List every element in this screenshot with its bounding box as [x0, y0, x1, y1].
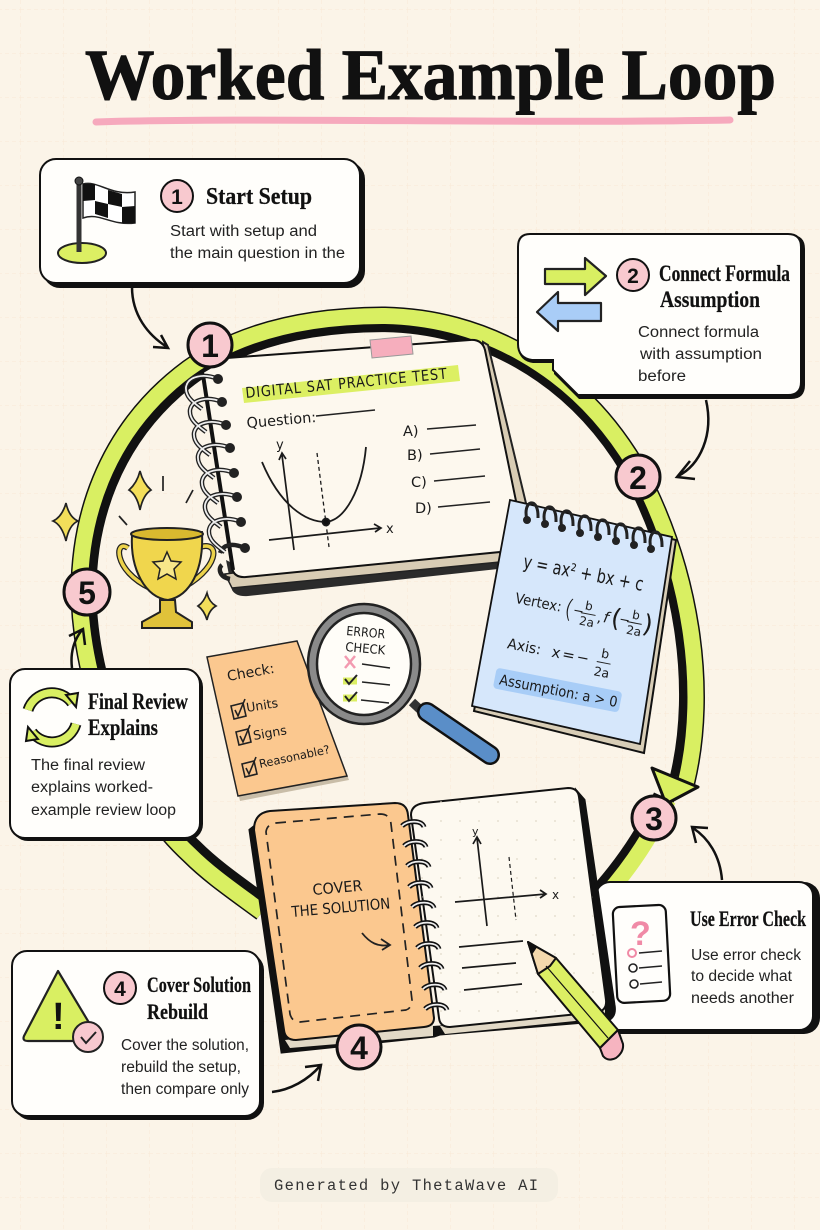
pencil: [528, 942, 623, 1060]
title underline: [96, 120, 730, 122]
card 4: cover solution rebuild: Rebuild: [147, 999, 208, 1024]
card 2: connect formula assumption: Assumption: [660, 287, 760, 312]
number badge 2: [617, 259, 649, 291]
ring badge 2: 2: [629, 460, 647, 496]
question label: Question:: [246, 410, 317, 432]
notebook: cover the solution: [250, 788, 614, 1052]
formula text: f: [602, 608, 613, 627]
arrow: card 5 to step 5: [69, 629, 85, 668]
formula text: b: [600, 645, 611, 662]
formula text: −: [572, 603, 585, 620]
number badge 2: 2: [627, 265, 639, 288]
card body: Start with setup and: [170, 223, 317, 240]
card 2: connect formula assumption: with assumption: [639, 346, 762, 363]
icon: error checklist: [613, 905, 670, 1003]
sticky note: check list: Units: [245, 695, 279, 715]
formula text: (: [609, 603, 624, 633]
arrow: card 4 to step 4: [272, 1065, 321, 1092]
magnifier: CHECK: [345, 639, 387, 658]
right page: [411, 788, 606, 1027]
number badge 1: 1: [171, 186, 183, 209]
formula text: Assumption: a > 0: [498, 672, 619, 711]
ring badge 5: 5: [78, 575, 96, 611]
formula text: [493, 550, 662, 716]
ring badge 4: 4: [350, 1030, 368, 1066]
page graph: x: [552, 888, 559, 902]
formula text: b: [584, 598, 594, 614]
ring badge 4: [337, 1025, 381, 1069]
formula text: Axis:: [506, 636, 542, 659]
parabola graph: y: [276, 438, 284, 453]
card body: Use error check: [691, 947, 801, 964]
card 2: connect formula assumption: [518, 234, 805, 399]
magnifier: ERROR: [346, 623, 386, 641]
card 4: cover solution rebuild: [12, 951, 264, 1120]
card body: Connect formula: [638, 324, 759, 341]
answer lines: [316, 410, 490, 507]
notebook: cover the solution: THE SOLUTION: [290, 894, 391, 921]
card 2: connect formula assumption: before: [638, 368, 686, 385]
loop ring: [80, 316, 695, 912]
formula text: 2a: [593, 663, 611, 681]
notebook heading highlight: [242, 365, 460, 403]
footer credit: Generated by ThetaWave AI: [274, 1177, 538, 1195]
icon: review cycle: [26, 693, 78, 742]
card title: Final Review: [88, 689, 188, 714]
page graph: y: [472, 825, 479, 838]
orange cover: [254, 803, 434, 1040]
sparkles: [53, 471, 216, 620]
icon: warning triangle: [24, 971, 103, 1052]
trophy: [119, 528, 213, 628]
formula text: (: [562, 594, 577, 624]
card 1: start setup: [40, 159, 365, 288]
card 4: cover solution rebuild: then compare only: [121, 1081, 249, 1098]
formula text: x = −: [550, 643, 591, 668]
card 3: use error check: needs another: [691, 990, 794, 1007]
card title: Cover Solution: [147, 972, 251, 997]
ring badge 2: [616, 455, 660, 499]
notepad coils: [523, 503, 662, 553]
parabola graph: [262, 438, 394, 550]
card title: Start Setup: [206, 184, 312, 210]
card 3: use error check: [596, 882, 820, 1034]
card 5: final review: example review loop: [31, 802, 176, 819]
sticky note: check list: Signs: [252, 722, 288, 743]
formula text: ): [640, 609, 655, 639]
sticky note: check list: Check:: [226, 661, 276, 685]
card body: Cover the solution,: [121, 1037, 249, 1054]
answer options: B): [407, 448, 423, 464]
ring badge 1: 1: [201, 328, 219, 364]
icon: warning triangle: !: [52, 996, 65, 1038]
cover arrow: [362, 933, 390, 950]
formula text: −: [618, 612, 631, 629]
arrow: card 3 to step 3: [692, 827, 722, 880]
ring arrowhead: [652, 768, 698, 804]
sticky note: check list: Reasonable?: [258, 742, 331, 771]
answer options: A): [403, 424, 419, 440]
pink tape: [370, 336, 413, 358]
icon: error checklist: ?: [630, 915, 651, 953]
card 4: cover solution rebuild: rebuild the setup,: [121, 1059, 241, 1076]
spiral binding: [186, 374, 250, 579]
formula text: b: [631, 608, 641, 623]
cover text: COVER: [312, 877, 363, 899]
magnifier: [308, 604, 490, 755]
ring badge 3: [632, 796, 676, 840]
formula text: ,: [596, 610, 603, 626]
card 5: final review: [10, 669, 203, 841]
sticky note: check list: [207, 641, 349, 801]
icon: checkered flag: [58, 177, 135, 263]
notepad: formula: [472, 500, 676, 753]
page graph: [455, 825, 559, 990]
card 5: final review: explains worked-: [31, 779, 153, 796]
answer options: D): [415, 501, 432, 517]
parabola graph: x: [386, 522, 394, 537]
card 5: final review: Explains: [88, 715, 158, 740]
ring badge 1: [188, 323, 232, 367]
formula text: Vertex:: [514, 591, 563, 616]
formula text: 2a: [578, 614, 595, 630]
answer options: [403, 424, 432, 517]
title: Worked Example Loop: [85, 35, 776, 115]
check items: [231, 699, 257, 777]
notebook: practice test: [186, 336, 530, 596]
icon: swap arrows: [537, 258, 606, 331]
footer credit: [260, 1168, 558, 1202]
formula text: y = ax² + bx + c: [521, 551, 645, 596]
ring badge 5: [64, 569, 110, 615]
formula text: 2a: [625, 623, 642, 639]
card 3: use error check: to decide what: [691, 968, 793, 985]
number badge 4: [104, 972, 136, 1004]
ring badge 3: 3: [645, 801, 663, 837]
answer options: C): [411, 475, 427, 491]
notebook heading: DIGITAL SAT PRACTICE TEST: [245, 365, 448, 402]
number badge 4: 4: [114, 978, 126, 1001]
arrow: card 2 to step 2: [677, 400, 708, 479]
page rings: [402, 822, 447, 1010]
card 1: start setup: the main question in the: [170, 245, 345, 262]
card body: The final review: [31, 757, 146, 774]
number badge 1: [161, 180, 193, 212]
arrow: card 1 to step 1: [132, 287, 168, 348]
